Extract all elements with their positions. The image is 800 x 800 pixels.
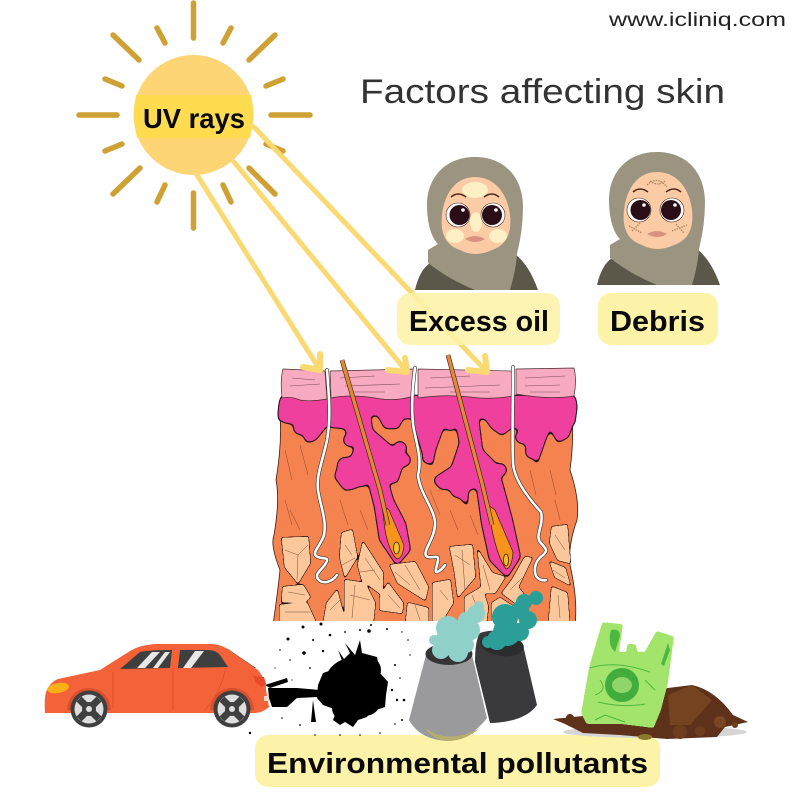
- skin cross-section: [273, 355, 578, 632]
- title: Factors affecting skin: [360, 73, 725, 111]
- epidermis magenta layer: [279, 396, 576, 577]
- label: excess oil: [397, 293, 560, 345]
- sweat ducts: [315, 367, 546, 582]
- website credit: www.icliniq.com: [608, 10, 786, 31]
- icon: sun rays: [79, 3, 310, 228]
- stratum corneum pink segments: [281, 368, 576, 401]
- car lights: [46, 681, 70, 695]
- icon: gray smokestack: [409, 643, 487, 741]
- label: environmental pollutants: [255, 735, 660, 787]
- exhaust splatter: [249, 622, 413, 736]
- arrows: UV rays to skin: [197, 127, 487, 372]
- smoke: light teal: [429, 601, 485, 662]
- label: excess oil: Excess oil: [409, 306, 549, 338]
- icon: sun with UV rays label: [134, 55, 254, 175]
- hair shafts: [342, 355, 492, 525]
- label: debris: [598, 293, 718, 345]
- dermis fibres: [285, 445, 560, 535]
- skin surface lines: [290, 376, 565, 392]
- debris specks: [629, 180, 687, 233]
- icon: car: [45, 644, 269, 728]
- hair follicle bulbs: [382, 505, 513, 569]
- car wheels: [67, 688, 254, 728]
- fat cells: [280, 525, 570, 632]
- icon: soil mound: [553, 685, 748, 740]
- label: environmental pollutants: Environmental pollutants: [267, 748, 648, 780]
- smoke: dark teal: [482, 591, 543, 650]
- fat cell mesh: [285, 535, 565, 620]
- car windows: [120, 650, 172, 669]
- icon: plastic bag: [582, 623, 673, 727]
- face: debris: [597, 152, 720, 285]
- label: debris: Debris: [610, 306, 705, 338]
- oil patches: [446, 182, 507, 243]
- icon: sun with UV rays label: UV rays: [143, 103, 245, 134]
- icon: dark smokestack: [475, 631, 537, 723]
- dermis layer: [273, 415, 578, 625]
- face: excess oil: [415, 157, 538, 290]
